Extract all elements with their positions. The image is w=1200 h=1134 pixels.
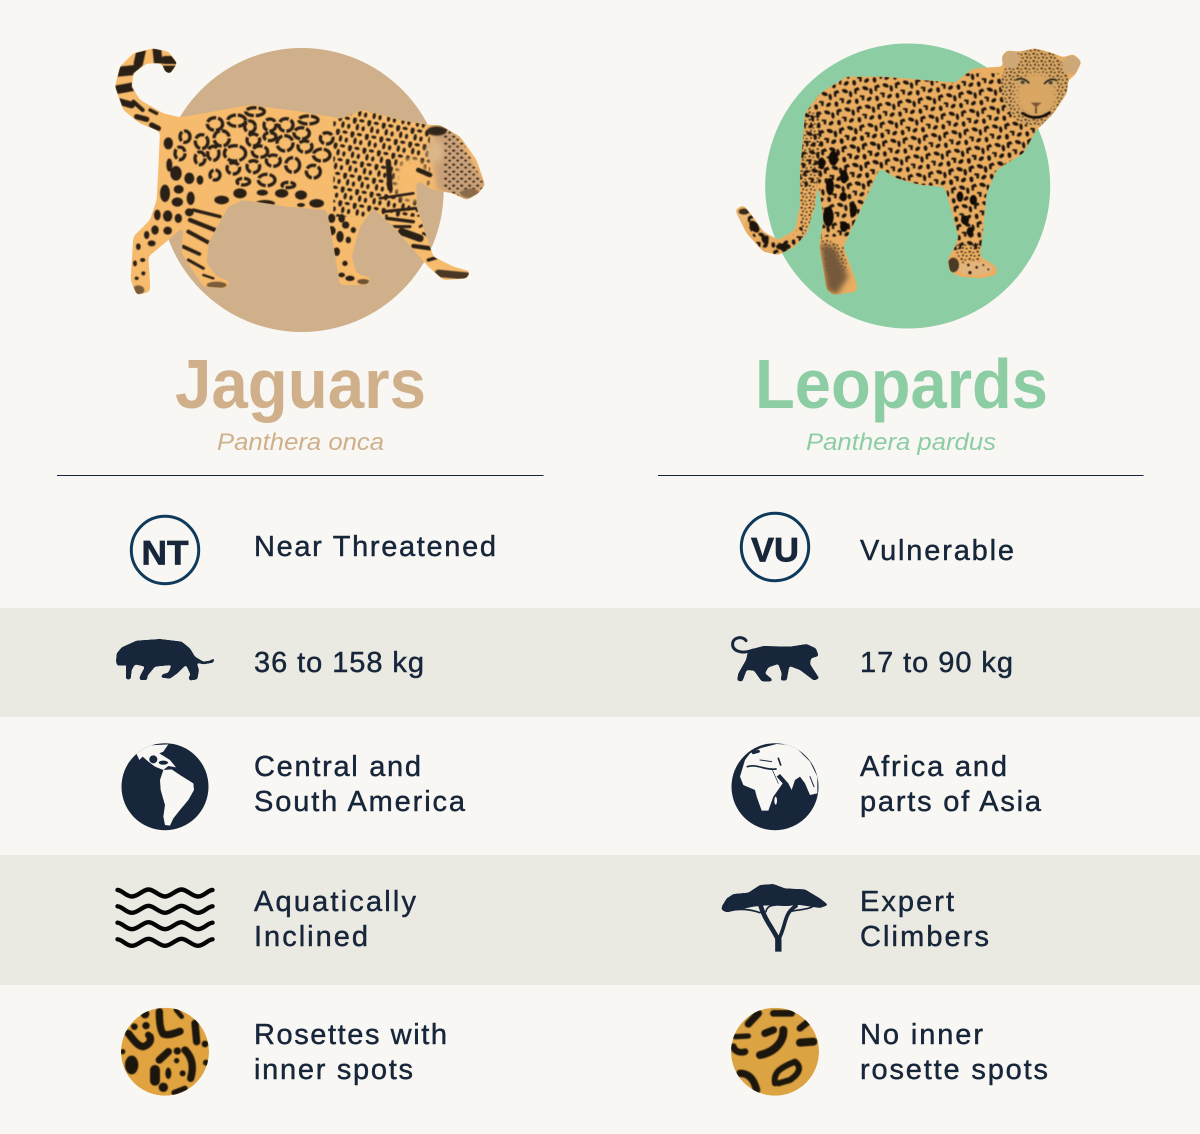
jaguar animal (110, 43, 490, 300)
text: expert climbers (860, 886, 989, 953)
text: Vulnerable: Vulnerable (860, 535, 1014, 567)
icon: globe Americas (122, 743, 208, 830)
text: aquatically inclined: Inclined (254, 921, 368, 953)
tan circle (160, 48, 444, 332)
icon: NT conservation status: NT (142, 534, 189, 572)
text: no inner rosette spots: No inner (860, 1019, 983, 1051)
icon: acacia tree (722, 884, 828, 952)
title: Jaguars: Jaguars (175, 345, 426, 423)
solid spots (164, 137, 173, 149)
text: no inner rosette spots: rosette spots (860, 1054, 1048, 1086)
face (1015, 72, 1057, 118)
icon: VU conservation status: VU (751, 532, 799, 570)
subtitle: Panthera pardus: Panthera pardus (806, 429, 996, 456)
neck bar (388, 162, 390, 188)
text: jaguar range: South America (254, 786, 466, 818)
icon: leopard fur swatch (731, 1008, 819, 1096)
icon: jaguar fur swatch (120, 1008, 209, 1096)
head (1001, 47, 1069, 126)
text: leopard weight: 17 to 90 kg (860, 647, 1013, 679)
subtitle: Panthera onca: Panthera onca (217, 429, 384, 456)
icon: jaguar silhouette (116, 639, 215, 681)
icon: leopard silhouette (733, 638, 819, 682)
text: aquatically inclined (254, 886, 416, 953)
text: leopard range: Africa and (860, 751, 1007, 783)
large rear spots (818, 151, 977, 236)
text: Near Threatened: Near Threatened (254, 531, 496, 563)
title: Leopards: Leopards (755, 345, 1048, 423)
text: aquatically inclined: Aquatically (254, 886, 416, 918)
rear and foot shading (820, 243, 848, 295)
paw & leg spots (136, 243, 141, 250)
icon: VU conservation status (741, 513, 809, 581)
stripes (115, 47, 467, 278)
text: rosettes with inner spots: Rosettes with (254, 1019, 447, 1051)
icon: NT conservation status (131, 516, 199, 584)
head tone (433, 127, 487, 202)
band: habit row (0, 855, 1200, 985)
green circle (765, 44, 1050, 328)
icon: waves (118, 890, 212, 946)
text: expert climbers: Climbers (860, 921, 989, 953)
leopard animal (730, 43, 1087, 300)
tail bands (138, 48, 142, 63)
text: expert climbers: Expert (860, 886, 954, 918)
band: weight row (0, 608, 1200, 717)
ears (1001, 50, 1020, 68)
panel: jaguar illustration (110, 43, 490, 332)
text: leopard range (860, 751, 1042, 818)
panel: leopard illustration (730, 43, 1087, 329)
text: leopard range: parts of Asia (860, 786, 1042, 818)
text: jaguar range (254, 751, 466, 818)
text: rosettes with inner spots (254, 1019, 447, 1086)
shoulder spot texture (333, 110, 430, 217)
text: jaguar weight: 36 to 158 kg (254, 647, 424, 679)
text: jaguar range: Central and (254, 751, 421, 783)
icon: globe Africa and Asia (732, 743, 818, 830)
text: no inner rosette spots (860, 1019, 1048, 1086)
text: rosettes with inner spots: inner spots (254, 1054, 413, 1086)
